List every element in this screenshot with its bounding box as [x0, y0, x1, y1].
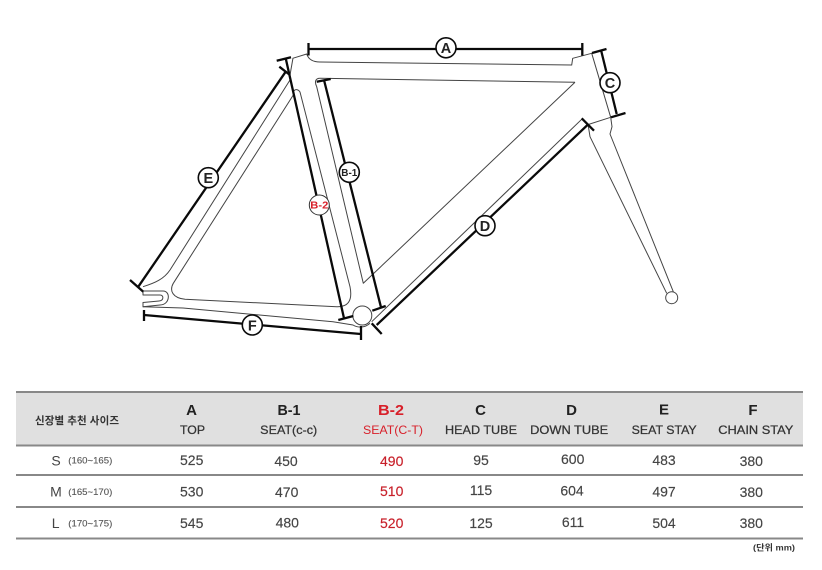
dimension C line: [592, 49, 626, 117]
badge F: F: [248, 318, 257, 334]
badge E: E: [203, 171, 213, 187]
row M: 380: [740, 484, 763, 500]
column D header: D: [566, 402, 577, 419]
dimension B-2 line: [277, 57, 353, 320]
dimension B-1 line: [317, 79, 386, 311]
table rules: [16, 392, 803, 538]
badge D: [475, 216, 495, 236]
column E header: SEAT STAY: [632, 423, 697, 437]
row S: S: [51, 452, 61, 468]
column C header: C: [475, 402, 486, 419]
unit note: (단위 mm): [753, 542, 795, 552]
badge D: D: [480, 219, 490, 235]
badge B-1: [339, 162, 359, 182]
row M: M: [50, 484, 62, 500]
row M: (165~170): [68, 487, 112, 498]
row M: [50, 482, 763, 500]
column B-2 header: SEAT(C-T): [363, 423, 423, 437]
badge B-2: B-2: [310, 201, 329, 212]
row S: 525: [180, 452, 204, 468]
badge B-2: [309, 195, 329, 215]
fork: [588, 117, 678, 304]
badge C: [600, 73, 620, 93]
row M: 115: [470, 482, 492, 498]
frame diagram: [130, 38, 678, 340]
size table: [16, 392, 803, 552]
row L: 380: [740, 515, 763, 531]
badge A: [436, 38, 456, 58]
row S: 490: [380, 453, 404, 469]
row L: 125: [469, 515, 493, 531]
row L: 545: [180, 515, 204, 531]
badge C: C: [605, 76, 616, 92]
row S: 450: [274, 453, 298, 469]
row L: L: [52, 515, 60, 531]
column B-2 header: B-2: [378, 402, 404, 419]
dimension E line: [130, 67, 290, 292]
column B-2 header: [363, 402, 423, 437]
column F header: F: [748, 402, 758, 419]
dimension F line: [144, 310, 361, 340]
badge A: A: [441, 41, 452, 57]
row L: 520: [380, 515, 404, 531]
column F header: CHAIN STAY: [718, 423, 793, 437]
column F header: [718, 402, 793, 437]
header: recommended size by height: 신장별 추천 사이즈: [35, 414, 119, 427]
column E header: E: [659, 402, 669, 418]
row S: 380: [740, 453, 763, 469]
table header band: [16, 392, 803, 445]
row M: 470: [275, 484, 299, 500]
column E header: [632, 402, 697, 437]
badge B-1: B-1: [341, 168, 358, 179]
column B-1 header: B-1: [278, 402, 300, 419]
row L: 504: [652, 515, 676, 531]
column A header: A: [186, 402, 197, 419]
row S: 95: [473, 452, 489, 468]
badge F: [242, 315, 262, 335]
column A header: [180, 402, 205, 437]
bike frame outline: [143, 50, 617, 327]
column A header: TOP: [180, 423, 205, 437]
row L: [52, 514, 763, 531]
column D header: DOWN TUBE: [530, 423, 608, 437]
dimension D line: [372, 118, 594, 334]
row L: 480: [276, 514, 299, 530]
row S: (160~165): [68, 456, 112, 466]
row M: 604: [560, 482, 584, 498]
column B-1 header: SEAT(c-c): [260, 423, 317, 437]
row M: 510: [380, 483, 404, 499]
column C header: HEAD TUBE: [445, 423, 517, 437]
column D header: [530, 402, 608, 437]
column B-1 header: [260, 402, 317, 437]
row M: 530: [180, 484, 204, 500]
row S: [51, 451, 763, 469]
column C header: [445, 402, 517, 437]
badge E: [198, 168, 218, 188]
bottom bracket: [353, 306, 372, 325]
row L: (170~175): [68, 518, 112, 530]
row S: 600: [561, 451, 585, 467]
dimension A line: [308, 43, 582, 56]
row L: 611: [562, 514, 584, 530]
row S: 483: [652, 452, 676, 468]
row M: 497: [652, 484, 676, 500]
